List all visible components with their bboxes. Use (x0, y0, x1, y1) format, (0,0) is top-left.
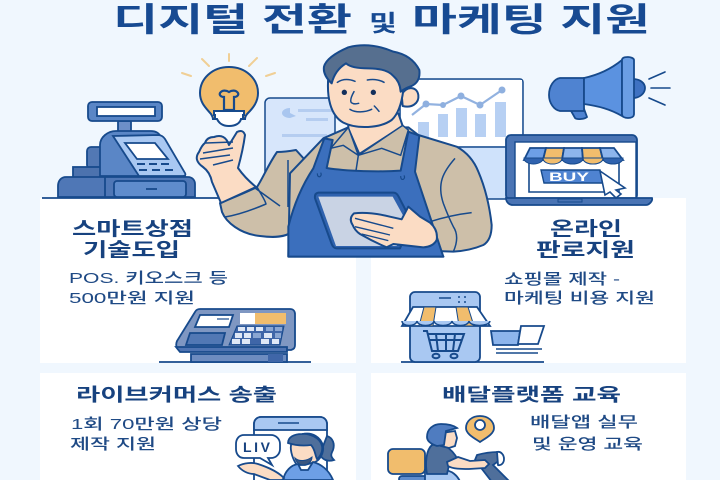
icon: light bulb (182, 54, 275, 126)
icon: online shop with cart (401, 292, 544, 362)
icon: laptop with online store (506, 135, 652, 205)
person: shop owner (197, 45, 492, 257)
face details (342, 90, 347, 95)
title (113, 1, 650, 38)
text: smart store: 500만원 지원 (69, 290, 195, 307)
panel: smart store (40, 198, 356, 363)
arm (447, 457, 489, 469)
apron (288, 132, 443, 257)
title: 및 (369, 10, 397, 36)
icon: cash register (58, 102, 195, 197)
text: smart store (69, 218, 228, 307)
torso (426, 444, 458, 474)
chart: growth board (400, 79, 523, 199)
text: smart store: POS. 키오스크 등 (69, 270, 228, 287)
woman (238, 434, 334, 480)
left sleeve (220, 150, 305, 237)
text: live commerce (70, 385, 277, 453)
counter line (42, 197, 222, 199)
hair (324, 45, 420, 92)
torso shirt (288, 127, 492, 257)
text: delivery platform: 배달플랫폼 교육 (442, 385, 621, 405)
panel: live commerce (40, 373, 356, 480)
awning (524, 148, 623, 164)
awning (402, 307, 490, 326)
text: delivery platform (442, 385, 643, 453)
left fist (197, 131, 256, 203)
text: online sales (504, 218, 655, 307)
cart (423, 331, 464, 358)
text: live commerce: 1회 70만원 상당 (71, 416, 222, 433)
text: online sales: 쇼핑몰 제작 - (504, 271, 620, 288)
head (441, 431, 457, 448)
cursor (600, 171, 625, 198)
delivery box (388, 449, 425, 474)
tablet (315, 193, 412, 248)
scooter seat (399, 476, 439, 480)
icon: live streamer (236, 417, 334, 480)
icon: document panel behind person (265, 98, 335, 199)
collar (331, 127, 358, 155)
text: online sales: 마케팅 비용 지원 (504, 290, 655, 307)
title: 마케팅 지원 (412, 1, 650, 38)
text: smart store: 스마트상점 (72, 218, 193, 240)
location pin (466, 416, 494, 442)
buy button (541, 170, 603, 184)
icon: POS terminal (159, 309, 311, 362)
icon: megaphone (549, 57, 670, 119)
text: online sales: 온라인 (550, 218, 622, 240)
right hand (351, 207, 437, 247)
trend line (412, 86, 506, 115)
text: live commerce: 제작 지원 (70, 436, 156, 453)
side box (491, 326, 544, 353)
text: online sales: 판로지원 (536, 239, 635, 261)
title: 디지털 전환 (113, 1, 352, 38)
text: smart store: 기술도입 (83, 239, 180, 261)
neck (348, 113, 403, 154)
right sleeve creases (430, 158, 472, 252)
apron buttons (317, 173, 405, 179)
buy button: BUY (549, 170, 589, 184)
face (328, 57, 403, 127)
panel: online sales (371, 198, 686, 363)
icon: delivery rider (388, 416, 510, 480)
bars (418, 102, 506, 137)
text: live commerce: 라이브커머스 송출 (76, 385, 277, 405)
legs (425, 470, 461, 480)
LIV bubble: LIV (243, 439, 271, 455)
body parts in detail coordinates (288, 45, 492, 257)
panel: delivery platform (371, 373, 686, 480)
text: delivery platform: 배달앱 실무 (530, 414, 638, 431)
text: delivery platform: 및 운영 교육 (532, 436, 643, 453)
ear (402, 88, 418, 107)
